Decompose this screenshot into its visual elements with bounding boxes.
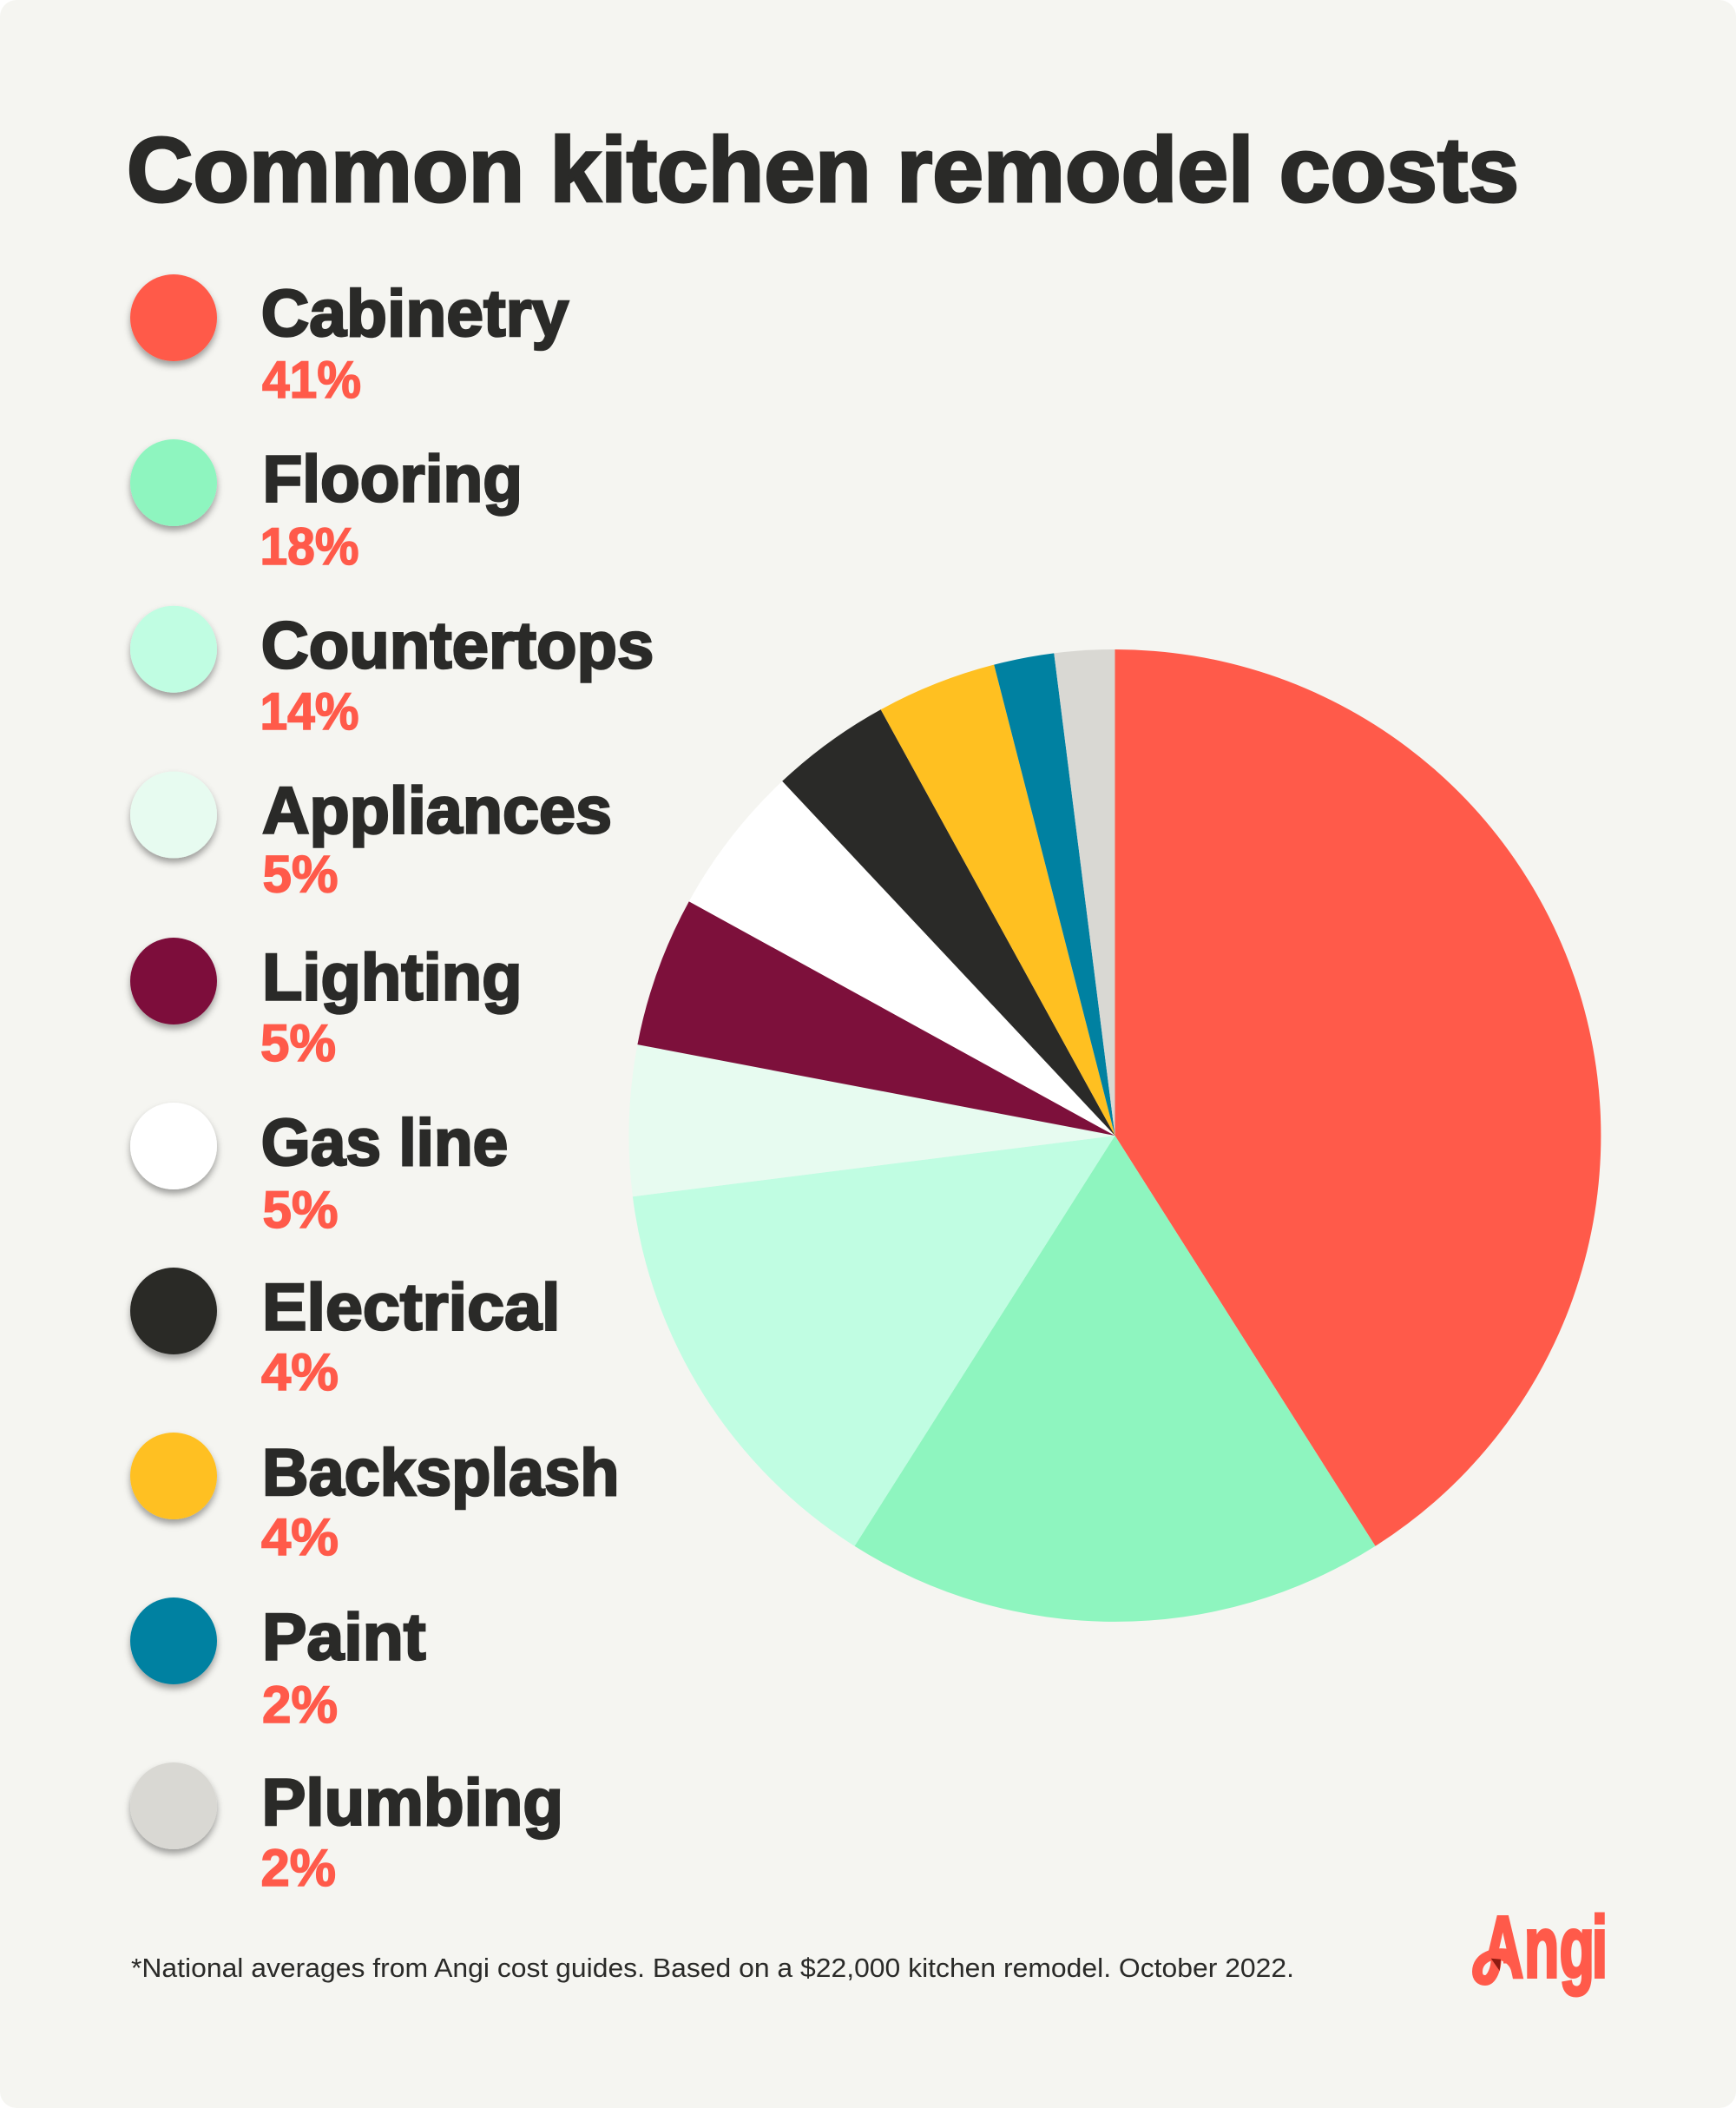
legend item: Backsplash bbox=[130, 1433, 620, 1566]
legend item: Cabinetry: Cabinetry bbox=[261, 277, 569, 351]
legend item: Plumbing bbox=[130, 1762, 563, 1897]
legend item: Gas line: 5% bbox=[262, 1181, 339, 1239]
title: Common kitchen remodel costs bbox=[127, 119, 1519, 221]
legend item: Backsplash: Backsplash bbox=[262, 1436, 620, 1510]
slice: Backsplash 4% bbox=[881, 665, 1115, 1136]
legend item: Countertops: Countertops bbox=[261, 609, 654, 682]
legend bbox=[130, 274, 654, 1897]
legend item: Backsplash: 4% bbox=[261, 1508, 339, 1566]
legend item: Countertops bbox=[130, 606, 654, 741]
legend item: Lighting: Lighting bbox=[262, 941, 523, 1014]
legend item: Flooring: Flooring bbox=[262, 443, 523, 516]
legend item: Plumbing: 2% bbox=[260, 1839, 336, 1897]
slice: Countertops 14% bbox=[633, 1136, 1115, 1546]
footnote: *National averages from Angi cost guides. Based on a $22,000 kitchen remodel. October 2022. bbox=[131, 1953, 1294, 1983]
legend item: Cabinetry bbox=[130, 274, 569, 409]
slice: Cabinetry 41% bbox=[1115, 649, 1601, 1546]
slice: Electrical 4% bbox=[782, 709, 1115, 1136]
legend item: Electrical: Electrical bbox=[262, 1271, 561, 1344]
legend item: Gas line bbox=[130, 1103, 508, 1239]
legend item: Flooring: 18% bbox=[260, 517, 359, 576]
legend item: Flooring bbox=[130, 439, 523, 576]
legend item: Appliances bbox=[130, 771, 612, 904]
legend item: Paint: 2% bbox=[262, 1676, 338, 1734]
legend item: Appliances: 5% bbox=[262, 846, 339, 904]
legend item: Countertops: 14% bbox=[260, 682, 359, 741]
legend item: Paint: Paint bbox=[262, 1601, 425, 1674]
slice: Plumbing 2% bbox=[1054, 649, 1115, 1136]
legend item: Gas line: Gas line bbox=[261, 1106, 508, 1180]
legend item: Appliances: Appliances bbox=[262, 774, 612, 847]
pie chart bbox=[628, 649, 1601, 1622]
legend item: Paint bbox=[130, 1597, 425, 1734]
slice: Flooring 18% bbox=[854, 1136, 1375, 1622]
legend item: Electrical: 4% bbox=[261, 1343, 339, 1401]
legend item: Lighting bbox=[130, 938, 523, 1072]
logo: Angi: Angi bbox=[1483, 1898, 1608, 1995]
slice: Gas line 5% bbox=[689, 781, 1115, 1136]
legend item: Lighting: 5% bbox=[260, 1014, 336, 1072]
slice: Appliances 5% bbox=[628, 1044, 1115, 1196]
legend item: Electrical bbox=[130, 1268, 561, 1401]
slice: Lighting 5% bbox=[637, 901, 1115, 1136]
slice: Paint 2% bbox=[994, 653, 1115, 1136]
legend item: Cabinetry: 41% bbox=[262, 351, 361, 409]
legend item: Plumbing: Plumbing bbox=[262, 1766, 563, 1840]
